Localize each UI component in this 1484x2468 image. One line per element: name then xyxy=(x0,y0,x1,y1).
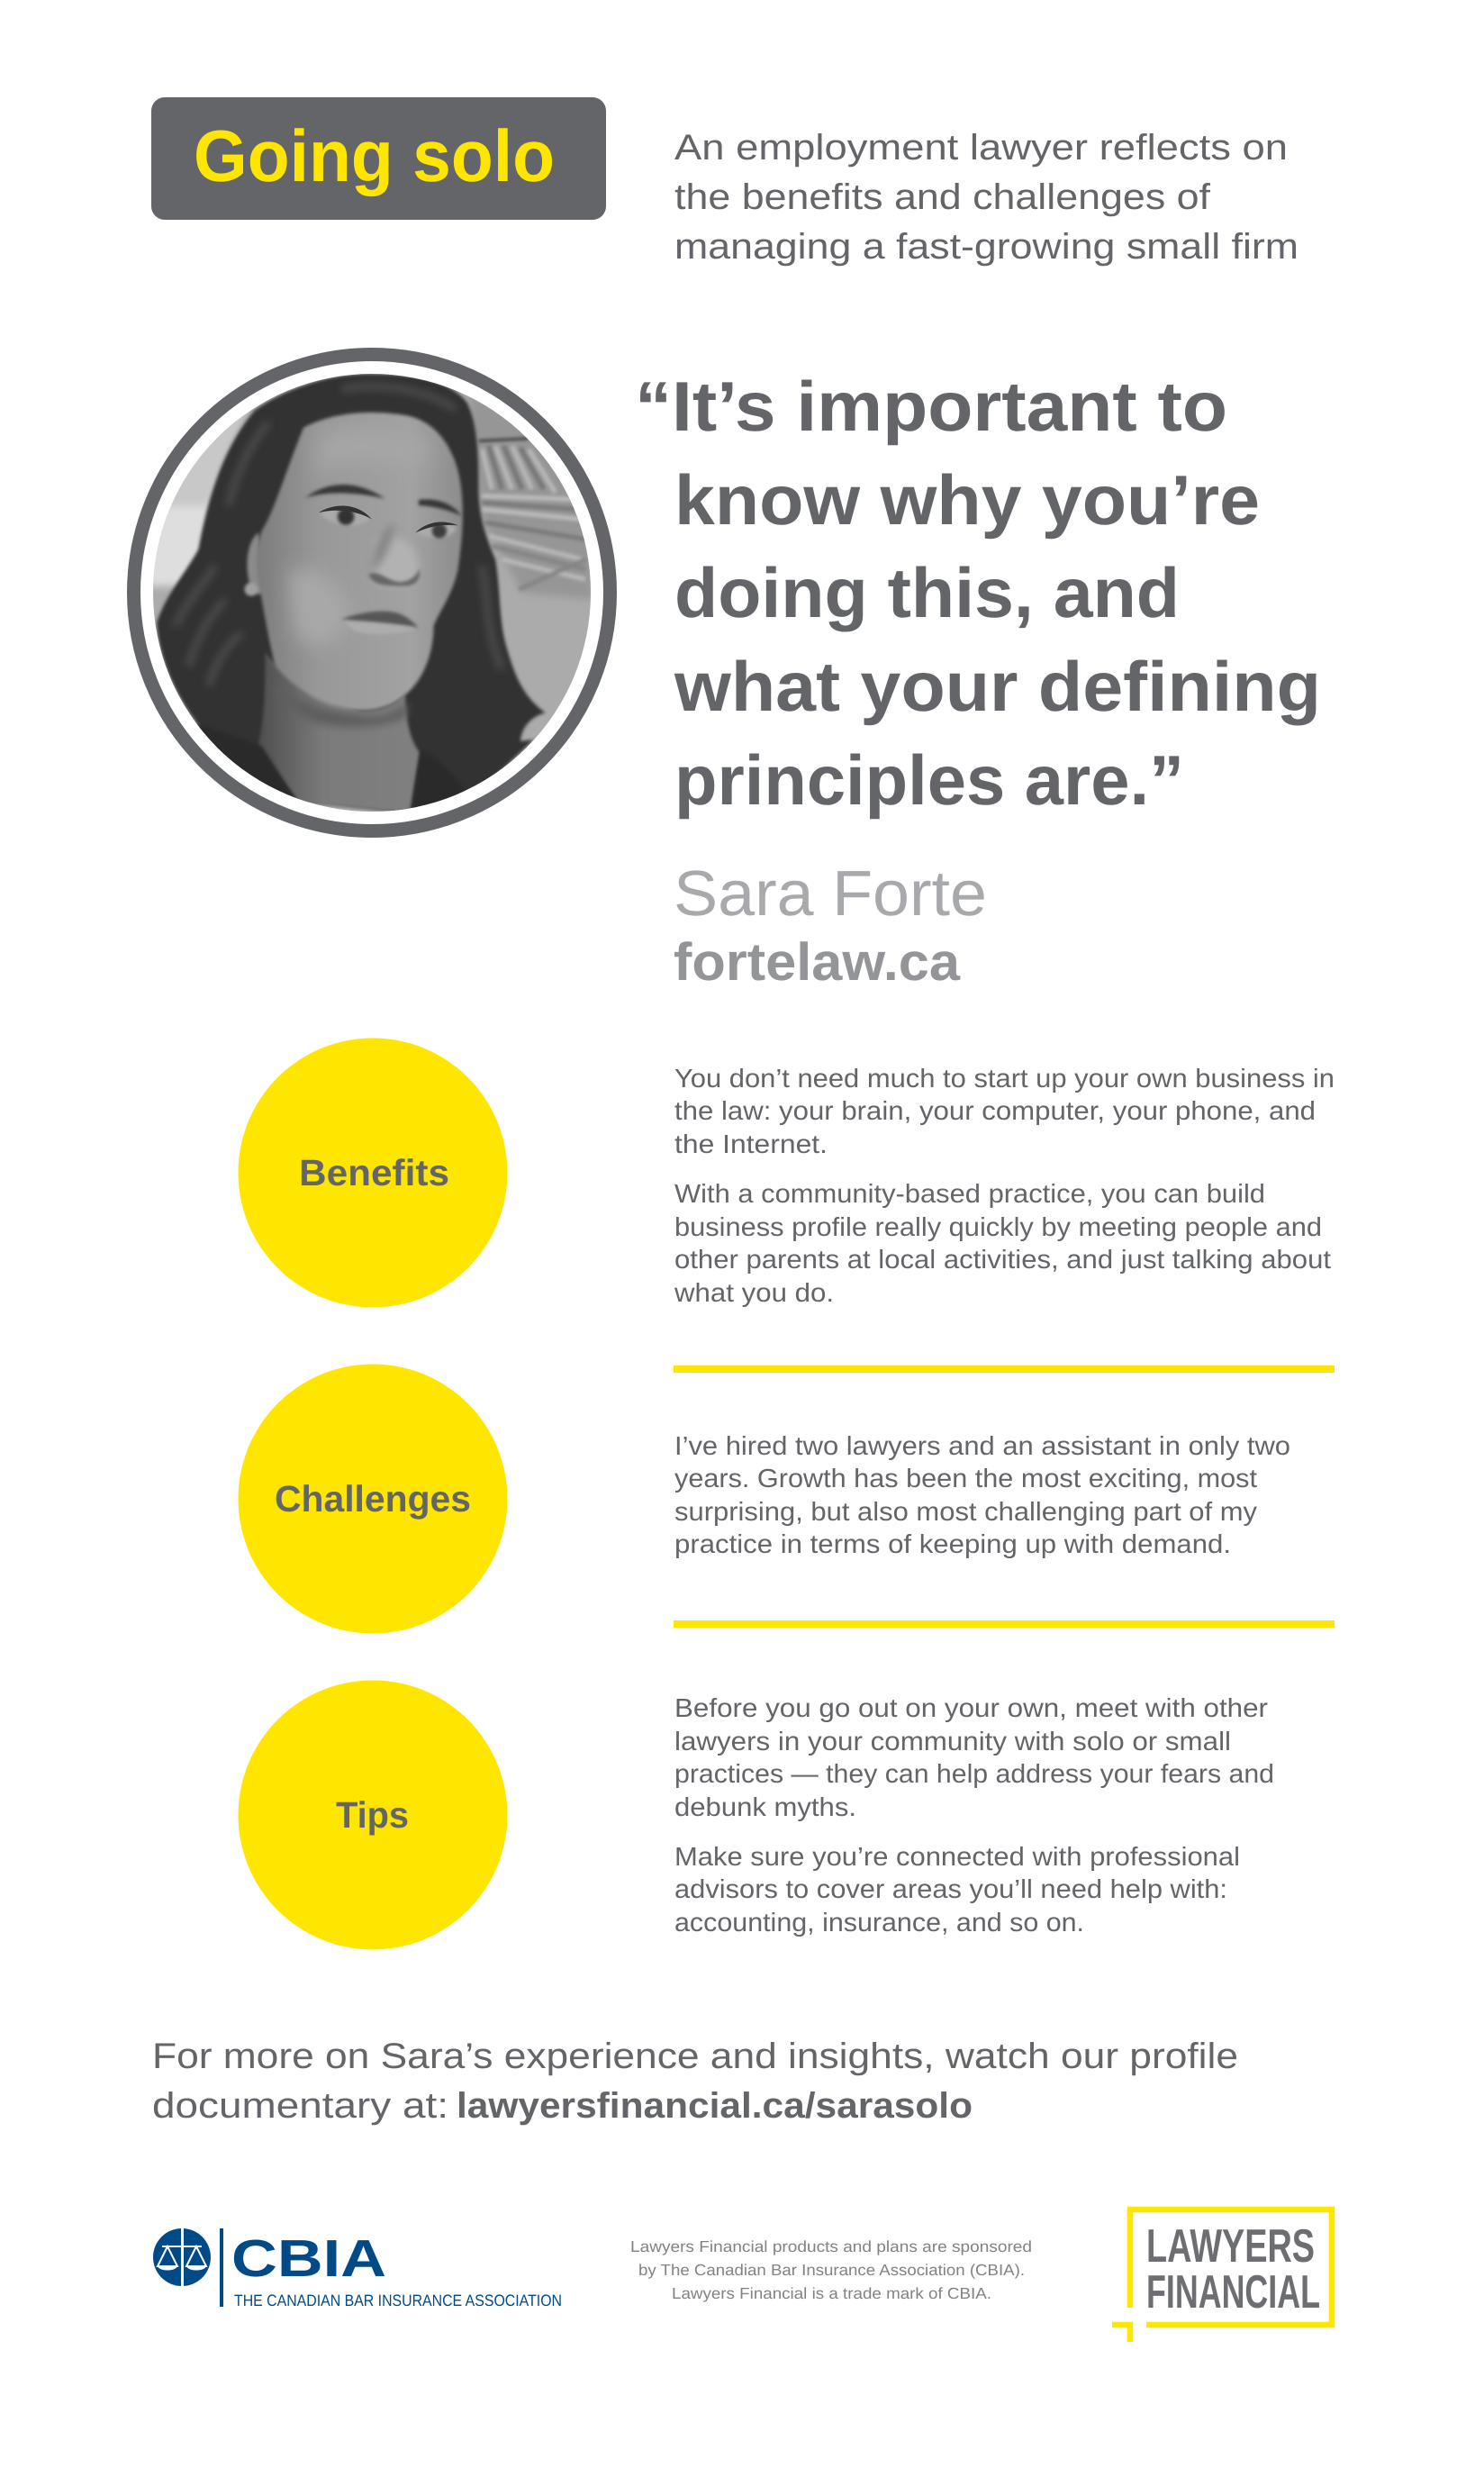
section: tips text: Before you go out on your own, meet with other xyxy=(674,1694,1268,1723)
section: tips text: practices — they can help address your fears and xyxy=(674,1760,1274,1789)
logo: Lawyers Financial: FINANCIAL xyxy=(1146,2266,1320,2318)
quote: what your defining xyxy=(674,647,1321,726)
section: challenges text: years. Growth has been the most exciting, most xyxy=(674,1465,1257,1493)
mouth xyxy=(341,612,419,628)
jacket xyxy=(196,722,298,798)
quote xyxy=(635,367,1321,820)
section: tips circle: Tips xyxy=(336,1794,409,1836)
infographic page xyxy=(127,97,1335,2342)
earring xyxy=(245,583,258,596)
section: benefits text: With a community-based practice, you can build xyxy=(674,1180,1265,1209)
quote: doing this, and xyxy=(674,553,1180,632)
title badge: Going solo xyxy=(194,116,555,197)
icon: scales of justice xyxy=(153,2228,211,2286)
attribution website: fortelaw.ca xyxy=(674,932,961,992)
section: benefits text: business profile really quickly by meeting people and xyxy=(674,1213,1322,1242)
section: challenges circle xyxy=(238,1364,508,1634)
call to action xyxy=(152,2037,1238,2126)
call to action: lawyersfinancial.ca/sarasolo xyxy=(457,2086,973,2126)
call to action: documentary at: xyxy=(152,2086,448,2126)
section: tips text: Make sure you’re connected with professional xyxy=(674,1843,1240,1872)
section: benefits text: the Internet. xyxy=(674,1130,828,1159)
logo: CBIA: CBIA xyxy=(231,2229,386,2288)
section: challenges text: I’ve hired two lawyers and an assistant in only two xyxy=(674,1432,1290,1461)
section: benefits circle xyxy=(238,1038,508,1308)
subtitle: the benefits and challenges of xyxy=(674,177,1211,217)
section: benefits text: what you do. xyxy=(674,1279,834,1308)
sponsor disclaimer: Lawyers Financial is a trade mark of CBIA. xyxy=(672,2284,991,2302)
section: challenges text: practice in terms of keeping up with demand. xyxy=(674,1530,1231,1559)
section: challenges text xyxy=(674,1432,1290,1559)
section: benefits text: other parents at local activities, and just talking about xyxy=(674,1246,1331,1275)
nose shadow xyxy=(368,568,420,586)
section: tips circle xyxy=(238,1681,508,1949)
section: tips text: lawyers in your community with solo or small xyxy=(674,1728,1231,1756)
call to action: For more on Sara’s experience and insights, watch our profile xyxy=(152,2037,1238,2076)
section: benefits text: the law: your brain, your computer, your phone, and xyxy=(674,1097,1316,1126)
logo: CBIA xyxy=(153,2228,562,2309)
face xyxy=(257,413,463,711)
logo: CBIA: THE CANADIAN BAR INSURANCE ASSOCIATION xyxy=(234,2291,562,2309)
section: benefits text xyxy=(674,1065,1335,1308)
quote: know why you’re xyxy=(674,460,1260,540)
title badge xyxy=(151,97,606,220)
subtitle xyxy=(674,128,1298,267)
section: challenges circle: Challenges xyxy=(275,1478,471,1520)
sponsor disclaimer: by The Canadian Bar Insurance Association (CBIA). xyxy=(638,2261,1025,2279)
ear xyxy=(247,532,267,594)
section: tips text: debunk myths. xyxy=(674,1793,856,1822)
section: tips text: advisors to cover areas you’ll need help with: xyxy=(674,1875,1227,1904)
quote: “It’s important to xyxy=(635,367,1227,446)
portrait photo of Sara Forte in ring xyxy=(133,355,611,833)
eyes xyxy=(321,511,368,525)
logo: Lawyers Financial: LAWYERS xyxy=(1146,2220,1315,2273)
attribution name: Sara Forte xyxy=(674,858,987,930)
neck xyxy=(258,653,421,812)
logo: Lawyers Financial xyxy=(1112,2209,1332,2342)
quote: principles are.” xyxy=(674,740,1184,820)
section: benefits circle: Benefits xyxy=(299,1152,449,1193)
eyebrows xyxy=(305,485,385,499)
section: challenges text: surprising, but also most challenging part of my xyxy=(674,1498,1258,1527)
section: tips text: accounting, insurance, and so on. xyxy=(674,1909,1084,1937)
subtitle: An employment lawyer reflects on xyxy=(674,128,1288,168)
sponsor disclaimer xyxy=(630,2237,1032,2302)
hair xyxy=(157,374,546,812)
subtitle: managing a fast-growing small firm xyxy=(674,227,1298,267)
section: tips text xyxy=(674,1694,1274,1937)
section: benefits text: You don’t need much to start up your own business in xyxy=(674,1065,1335,1093)
sponsor disclaimer: Lawyers Financial products and plans are sponsored xyxy=(630,2237,1032,2255)
